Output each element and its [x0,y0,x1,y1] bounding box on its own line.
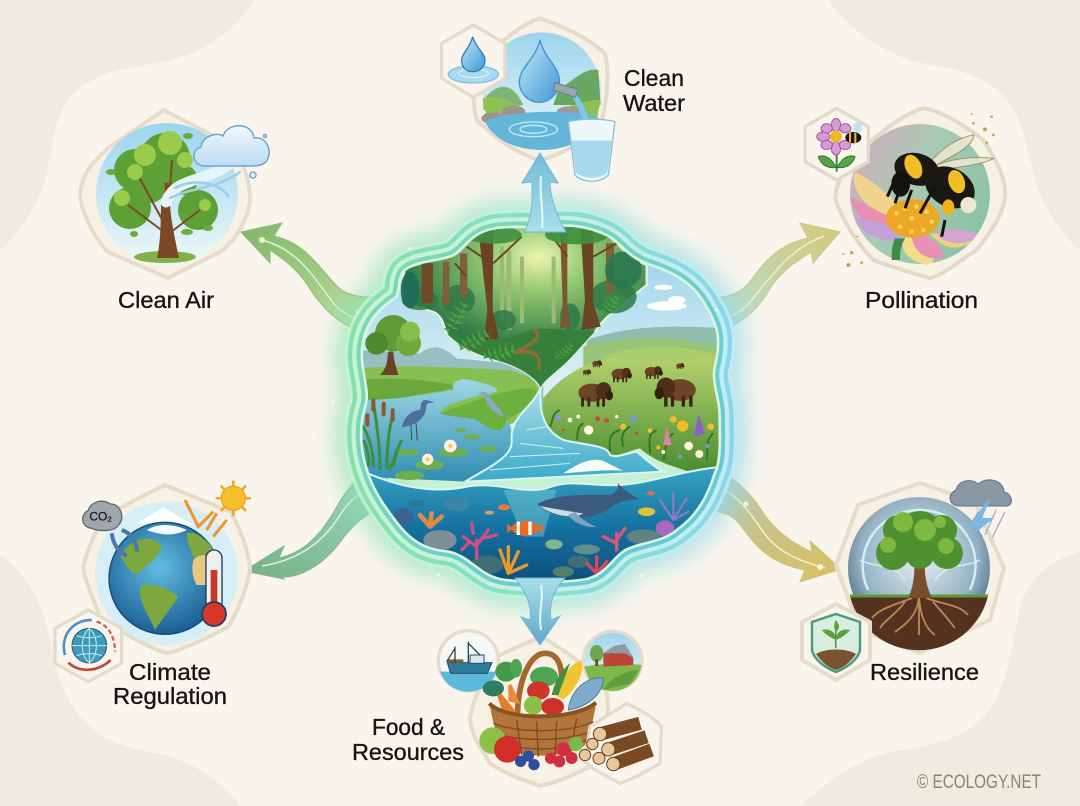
stream [573,93,594,143]
forest canopy panel [401,225,647,387]
fruit in front [479,727,583,770]
glowing ring [362,227,719,581]
ocean [369,466,716,580]
atmosphere [95,502,238,645]
ground [134,251,196,263]
food and resources label [352,714,464,765]
path [513,330,539,370]
pollination label: Pollination [865,287,978,313]
whale [537,483,639,527]
sky [364,226,714,398]
resilience medallion [802,480,1011,680]
arrow: to climate regulation [244,470,392,579]
water glass [568,119,615,181]
protective rings [860,510,980,590]
branches [455,233,617,277]
hills and banks [481,69,601,124]
boat icon [438,631,498,692]
distant pale trunks [500,247,556,330]
snowy peak [137,507,193,525]
small water icon [442,25,505,97]
pipe [553,83,578,97]
small globe icon [55,610,122,682]
energy arrows [185,500,227,537]
central ecosystem emblem [332,220,744,593]
forest floor [447,329,595,387]
clean water medallion [442,18,615,181]
flower centre [886,199,939,238]
river ripples [490,427,580,470]
arrow: to resilience [700,471,841,582]
shield icon [802,604,870,680]
resilience label: Resilience [870,659,979,685]
logs icon [579,703,662,783]
lake [360,379,512,482]
arrow: to food and resources [515,578,565,645]
small flower icon [805,108,868,180]
wildflowers [555,413,714,459]
frame [836,483,1004,653]
falling leaves [106,133,213,237]
background corner: bottom left [0,555,240,806]
climate regulation label: Climate [129,659,211,685]
wind swirl [166,162,240,202]
left marsh [357,347,543,427]
frame [474,18,607,160]
arrow: to pollination [702,223,840,334]
arrow: to clean air [241,223,385,337]
river [465,388,663,482]
water drop [519,40,559,102]
tree [109,131,218,258]
clean water label [623,65,685,116]
continents [121,533,213,630]
basket handle [517,653,562,720]
farm icon [583,631,642,691]
light beam [503,490,557,537]
purple soft coral [656,520,674,536]
CO2 cloud [83,501,122,531]
storm disc [848,497,990,639]
food and resources label: Resources [352,739,464,765]
canopy [876,511,963,570]
pollen specks [842,113,995,267]
basket [489,703,596,757]
climate regulation medallion [55,481,251,682]
background corner: top right [828,0,1080,250]
sparkles on ring [332,247,744,577]
cloud [194,126,269,166]
arrow: to clean water [522,153,566,232]
produce [483,659,603,715]
clean water label: Water [623,90,685,116]
pool [485,112,599,150]
disc [850,124,990,264]
corals [420,493,688,573]
lily pads [395,428,497,480]
climate regulation label [113,659,227,709]
wave crest [563,460,623,473]
frame [470,637,608,786]
sky disc [482,32,601,151]
earth [109,522,221,634]
copyright: © ECOLOGY.NET [917,772,1041,793]
food and resources label: Food & [372,714,445,740]
glow halo [362,227,719,581]
ripples [509,122,557,137]
clean air medallion [80,110,269,278]
frame [83,485,250,653]
rocks [393,508,660,577]
pollination medallion [805,108,1005,278]
canopy leaves [401,226,642,308]
right hills and meadow [537,327,723,473]
grass island [439,389,537,430]
small fish [408,491,655,549]
background corner: top left [0,0,255,250]
CO2 cloud: CO₂ [89,510,112,524]
CO2 arrows [112,530,137,556]
clownfish [507,521,543,536]
rain [970,510,1005,538]
clouds [647,285,687,311]
soil [850,596,988,650]
background corner: bottom right [800,552,1080,806]
herons [402,392,503,441]
landscape scene [362,226,718,580]
clean water label: Clean [624,65,684,91]
thermometer [202,550,226,626]
ferns [443,298,470,333]
frame [80,110,250,278]
storm cloud [950,480,1011,506]
sky disc [96,123,238,265]
sun [216,481,251,516]
bee [887,148,982,237]
big trunks [422,230,614,340]
climate regulation label: Regulation [113,683,227,709]
lightning bolt [964,500,994,542]
clean air label: Clean Air [118,287,214,313]
pollen florets [894,204,934,234]
flower petals [851,172,977,265]
food and resources medallion [438,631,662,786]
roots [872,596,968,635]
marsh tree [365,315,421,375]
wings [927,135,994,172]
undergrowth [402,280,637,330]
arctic [147,525,187,534]
cattails and reeds [360,398,402,470]
trunk [908,545,932,598]
bubbles [250,134,266,178]
frame [835,108,1005,278]
